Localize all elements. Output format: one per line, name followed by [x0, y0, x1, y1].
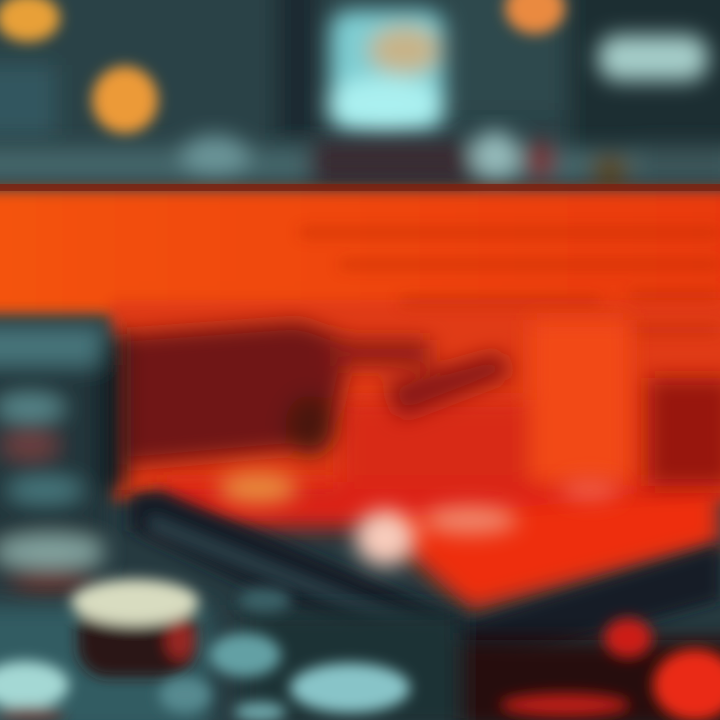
- panel: pale cyan window: [327, 10, 708, 133]
- panel: counter ledge: [0, 131, 720, 186]
- icon: red blobs bottom right: [500, 618, 720, 720]
- stripes on orange band: [300, 228, 720, 335]
- icon: orange lights: [0, 0, 565, 134]
- dark line above orange band: [0, 184, 720, 191]
- icon: coffee cup: [71, 579, 199, 677]
- panel: orange band: [0, 184, 720, 500]
- panel: dark upper wall: [0, 0, 720, 170]
- panel: dark tray edge: [130, 490, 720, 670]
- panel: dark red screen: [120, 322, 720, 486]
- icon: small cups and plates bottom: [0, 588, 410, 720]
- panel: lower dark foreground: [0, 605, 720, 720]
- panel: teal stack left: [0, 325, 124, 592]
- panel: bright red front: [160, 320, 720, 610]
- panel: glowing highlights on tray: [218, 472, 620, 566]
